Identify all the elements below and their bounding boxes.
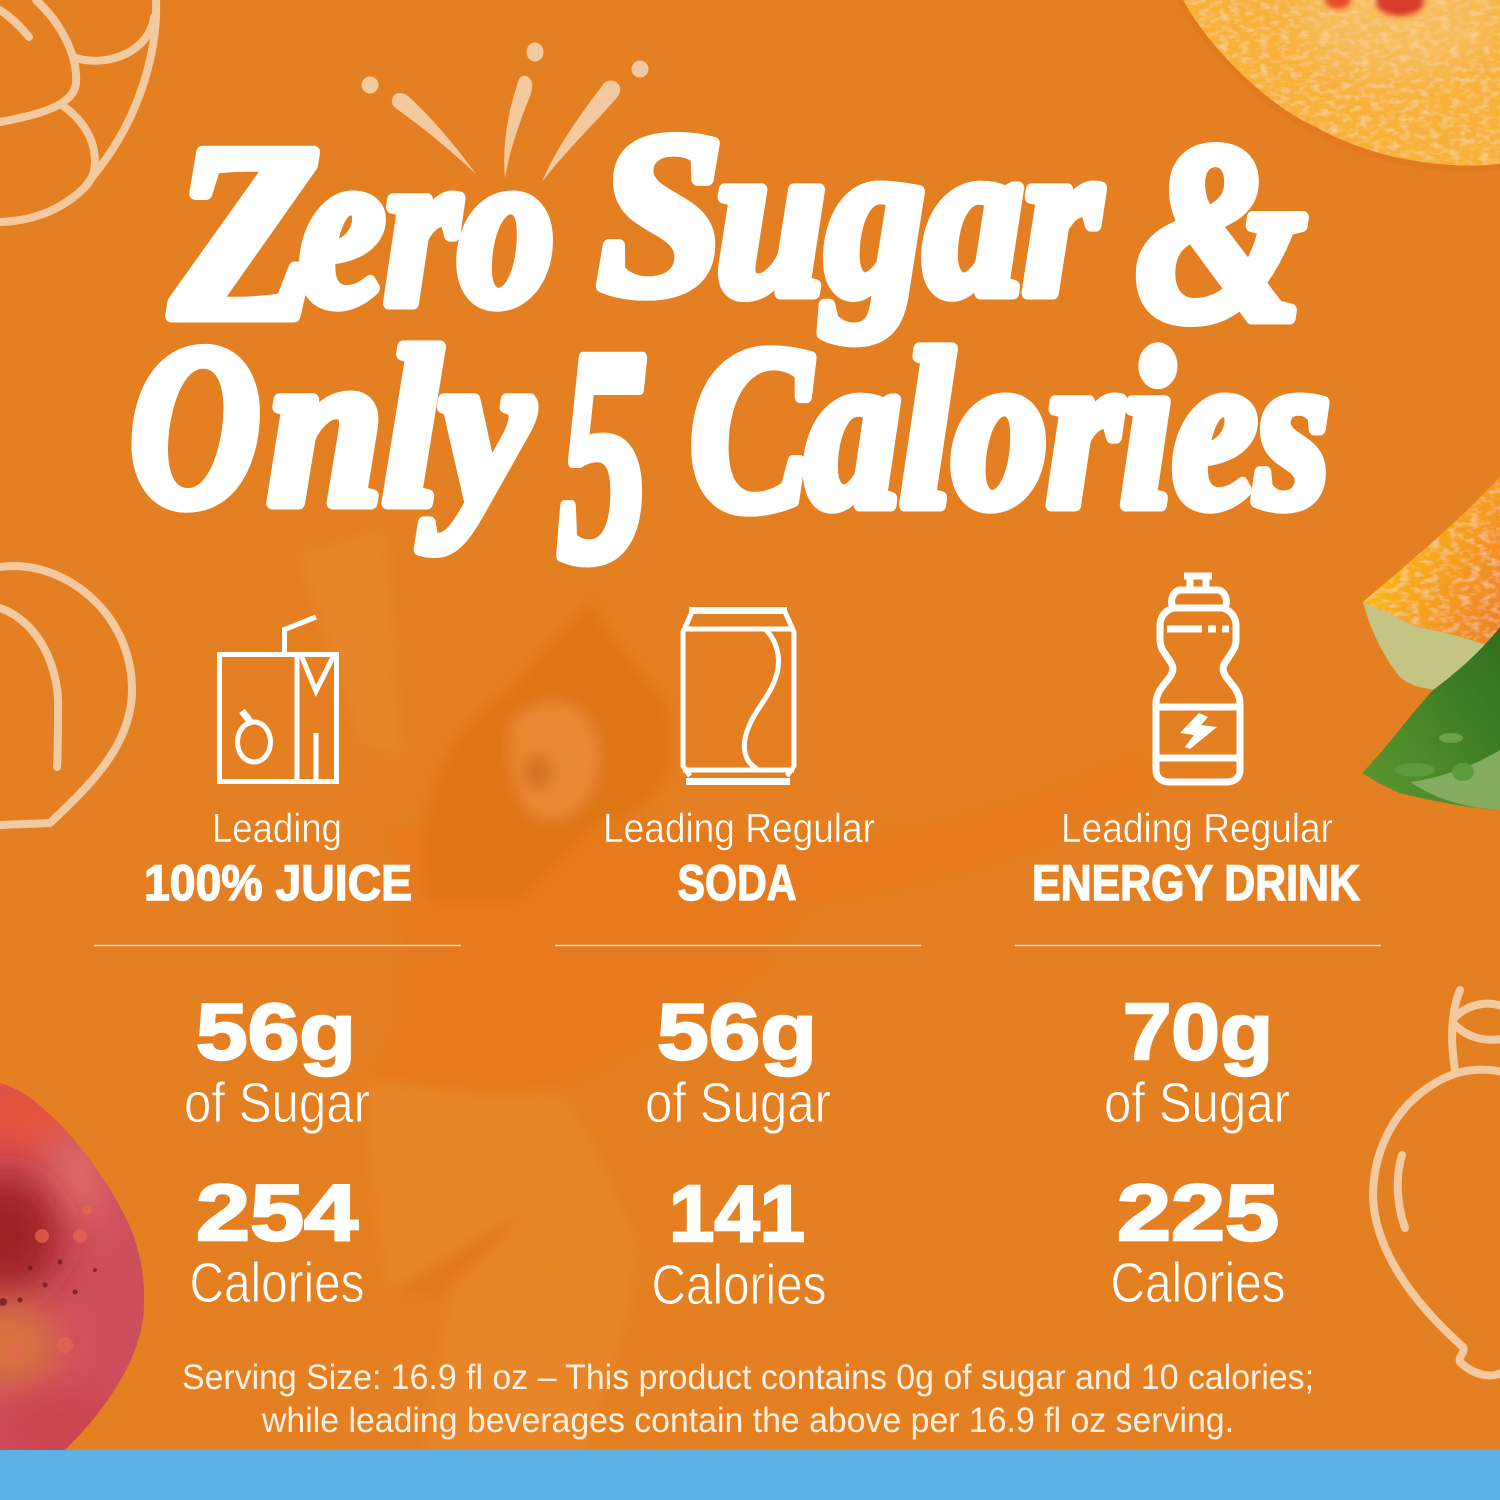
decorative outline: fruit top left xyxy=(0,0,156,222)
footnote: while leading beverages contain the above per 16.9 fl oz serving. xyxy=(261,1401,1234,1440)
sugar amount: 56g xyxy=(196,987,356,1076)
title line 2: alories xyxy=(806,304,1330,554)
photo: red mango bottom left xyxy=(0,1075,150,1452)
title line 2 xyxy=(130,286,1330,624)
category: SODA xyxy=(678,855,796,911)
icon: soda can xyxy=(683,610,794,782)
sugar unit: of Sugar xyxy=(645,1071,831,1135)
label: Leading Regular xyxy=(1061,805,1333,851)
calories amount: 254 xyxy=(196,1168,359,1257)
sugar amount: 56g xyxy=(657,987,817,1076)
calories unit: Calories xyxy=(190,1251,364,1315)
column: 100% juice xyxy=(94,617,461,1315)
column: soda xyxy=(555,610,921,1317)
footnote: Serving Size: 16.9 fl oz – This product contains 0g of sugar and 10 calories; xyxy=(182,1358,1314,1397)
title line 1: ero xyxy=(300,102,554,352)
photo: peach slice top right xyxy=(1183,0,1500,166)
title line 1: & xyxy=(1136,92,1306,374)
title line 1: ugar xyxy=(716,92,1102,342)
icon: sports bottle xyxy=(1156,576,1240,782)
calories unit: Calories xyxy=(1110,1251,1286,1315)
title line 2: nly xyxy=(268,302,533,552)
background photo: faded woman silhouette xyxy=(300,530,1148,1450)
label: Leading Regular xyxy=(603,805,875,851)
calories unit: Calories xyxy=(652,1253,826,1317)
calories amount: 225 xyxy=(1117,1168,1279,1257)
title line 2: 5 xyxy=(558,286,648,624)
title line 2: C xyxy=(690,299,812,560)
column: energy drink xyxy=(1015,576,1381,1315)
decorative outline: peach left xyxy=(0,566,132,825)
category: 100% JUICE xyxy=(144,855,412,911)
label: Leading xyxy=(212,805,342,851)
blue footer band xyxy=(0,1450,1500,1500)
footnote xyxy=(182,1358,1314,1440)
icon: juice box xyxy=(220,617,336,782)
category: ENERGY DRINK xyxy=(1032,855,1360,911)
title line 1: S xyxy=(598,86,723,343)
title xyxy=(130,86,1330,624)
calories amount: 141 xyxy=(669,1169,805,1258)
title line 2: O xyxy=(130,298,260,555)
decorative outline: mango right xyxy=(1373,990,1500,1375)
sugar unit: of Sugar xyxy=(1104,1071,1290,1135)
photo: mango slice and leaf right xyxy=(1362,477,1500,810)
sugar unit: of Sugar xyxy=(184,1071,370,1135)
icon: lightning bolt xyxy=(1180,713,1217,749)
title line 1: Z xyxy=(171,94,320,371)
splash accent above title xyxy=(362,42,648,182)
sugar amount: 70g xyxy=(1123,987,1273,1076)
title line 1 xyxy=(171,86,1306,374)
